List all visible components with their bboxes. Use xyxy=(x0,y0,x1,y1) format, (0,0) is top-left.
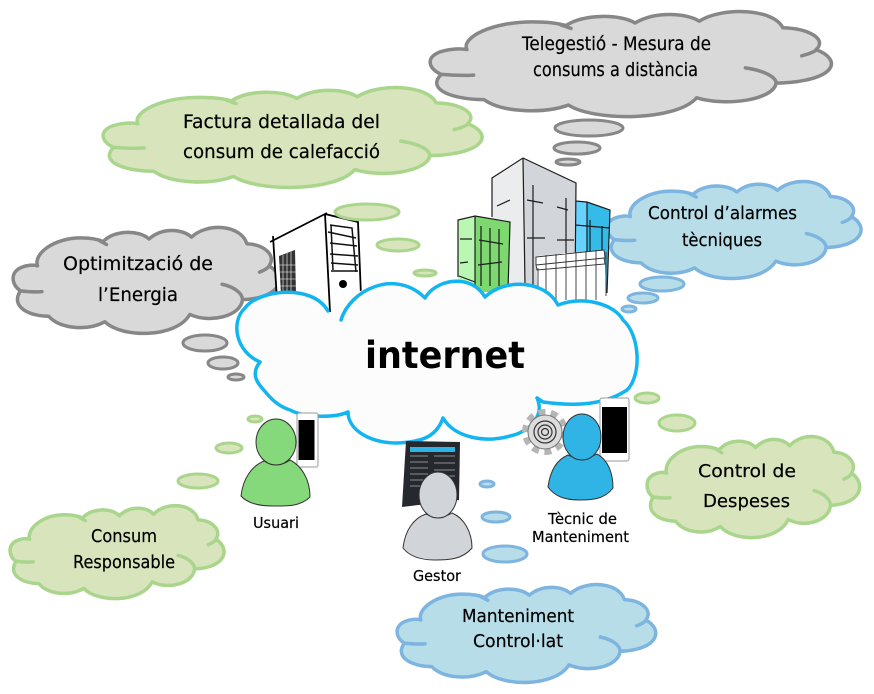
thought bubbles: manteniment controlat xyxy=(480,481,527,562)
text: control de despeses: Control de xyxy=(698,462,796,482)
text: control d'alarmes: Control d’alarmes xyxy=(648,204,797,224)
cloud: control d'alarmes xyxy=(607,181,861,279)
cloud shape: factura xyxy=(103,88,482,187)
head xyxy=(563,414,601,460)
thought bubbles: factura xyxy=(335,204,436,276)
text: telegestió: Telegestió - Mesura de xyxy=(521,33,711,55)
head xyxy=(256,419,296,465)
text: optimització: Optimització de xyxy=(63,253,213,275)
cloud fill xyxy=(237,281,637,443)
label: tècnic de manteniment xyxy=(532,510,629,546)
cloud: consum responsable xyxy=(10,506,224,599)
cloud outline xyxy=(237,281,637,443)
icon: phone xyxy=(600,398,629,461)
text: telegestió: consums a distància xyxy=(533,59,698,81)
body xyxy=(403,513,472,560)
text: manteniment controlat xyxy=(462,607,574,652)
text: manteniment controlat: Control·lat xyxy=(473,632,563,652)
cloud shape: telegestió xyxy=(430,12,831,117)
central internet cloud xyxy=(237,281,637,443)
text: control de despeses: Despeses xyxy=(703,492,790,512)
thought bubbles: control de despeses xyxy=(635,393,695,431)
text: control d'alarmes: tècniques xyxy=(682,231,762,251)
text: control de despeses xyxy=(698,462,796,512)
icon: gear xyxy=(525,412,565,452)
cloud shape: control d'alarmes xyxy=(607,181,861,279)
heading: internet: internet xyxy=(365,334,525,377)
text: optimització xyxy=(63,253,213,306)
cloud shape: optimització xyxy=(13,227,279,333)
text: factura detallada: Factura detallada del xyxy=(183,111,380,133)
text: manteniment controlat: Manteniment xyxy=(462,607,574,627)
cloud: manteniment controlat xyxy=(397,585,656,682)
cloud: telegestió xyxy=(430,12,831,117)
head xyxy=(419,472,457,518)
cloud shape: consum responsable xyxy=(10,506,224,599)
text: optimització: l’Energia xyxy=(98,284,178,306)
icon: phone xyxy=(297,413,318,467)
person: tècnic de manteniment xyxy=(525,398,629,546)
text: factura detallada: consum de calefacció xyxy=(183,141,380,163)
thought bubbles: telegestió xyxy=(554,120,623,165)
icon: grey tower xyxy=(492,158,576,290)
icon: tablet xyxy=(402,441,460,507)
text: consum responsable: Consum xyxy=(91,527,157,547)
cloud shape: control de despeses xyxy=(647,437,860,538)
text: telegestió xyxy=(521,33,711,81)
cloud: factura detallada xyxy=(103,88,482,187)
thought bubbles: consum responsable xyxy=(178,416,262,488)
icon: left building xyxy=(270,213,361,312)
cloud: control de despeses xyxy=(647,437,860,538)
thought bubbles: control d'alarmes xyxy=(622,277,684,312)
text: control d'alarmes xyxy=(648,204,797,251)
thought bubbles: optimització xyxy=(183,335,244,380)
icon: blue building xyxy=(575,201,610,293)
body xyxy=(548,454,613,500)
label: tècnic de manteniment: Manteniment xyxy=(532,528,629,546)
person: usuari xyxy=(241,413,318,532)
text: factura detallada xyxy=(183,111,380,163)
label: usuari: Usuari xyxy=(253,514,299,532)
label: gestor: Gestor xyxy=(413,567,462,585)
text: consum responsable xyxy=(73,527,175,573)
icon: radiator xyxy=(536,250,607,302)
label: tècnic de manteniment: Tècnic de xyxy=(547,510,617,528)
person: gestor xyxy=(402,441,472,585)
body xyxy=(241,460,310,506)
cloud shape: manteniment controlat xyxy=(397,585,656,682)
cloud: optimització xyxy=(13,227,279,333)
icon: green building xyxy=(458,216,510,292)
text: consum responsable: Responsable xyxy=(73,553,175,573)
